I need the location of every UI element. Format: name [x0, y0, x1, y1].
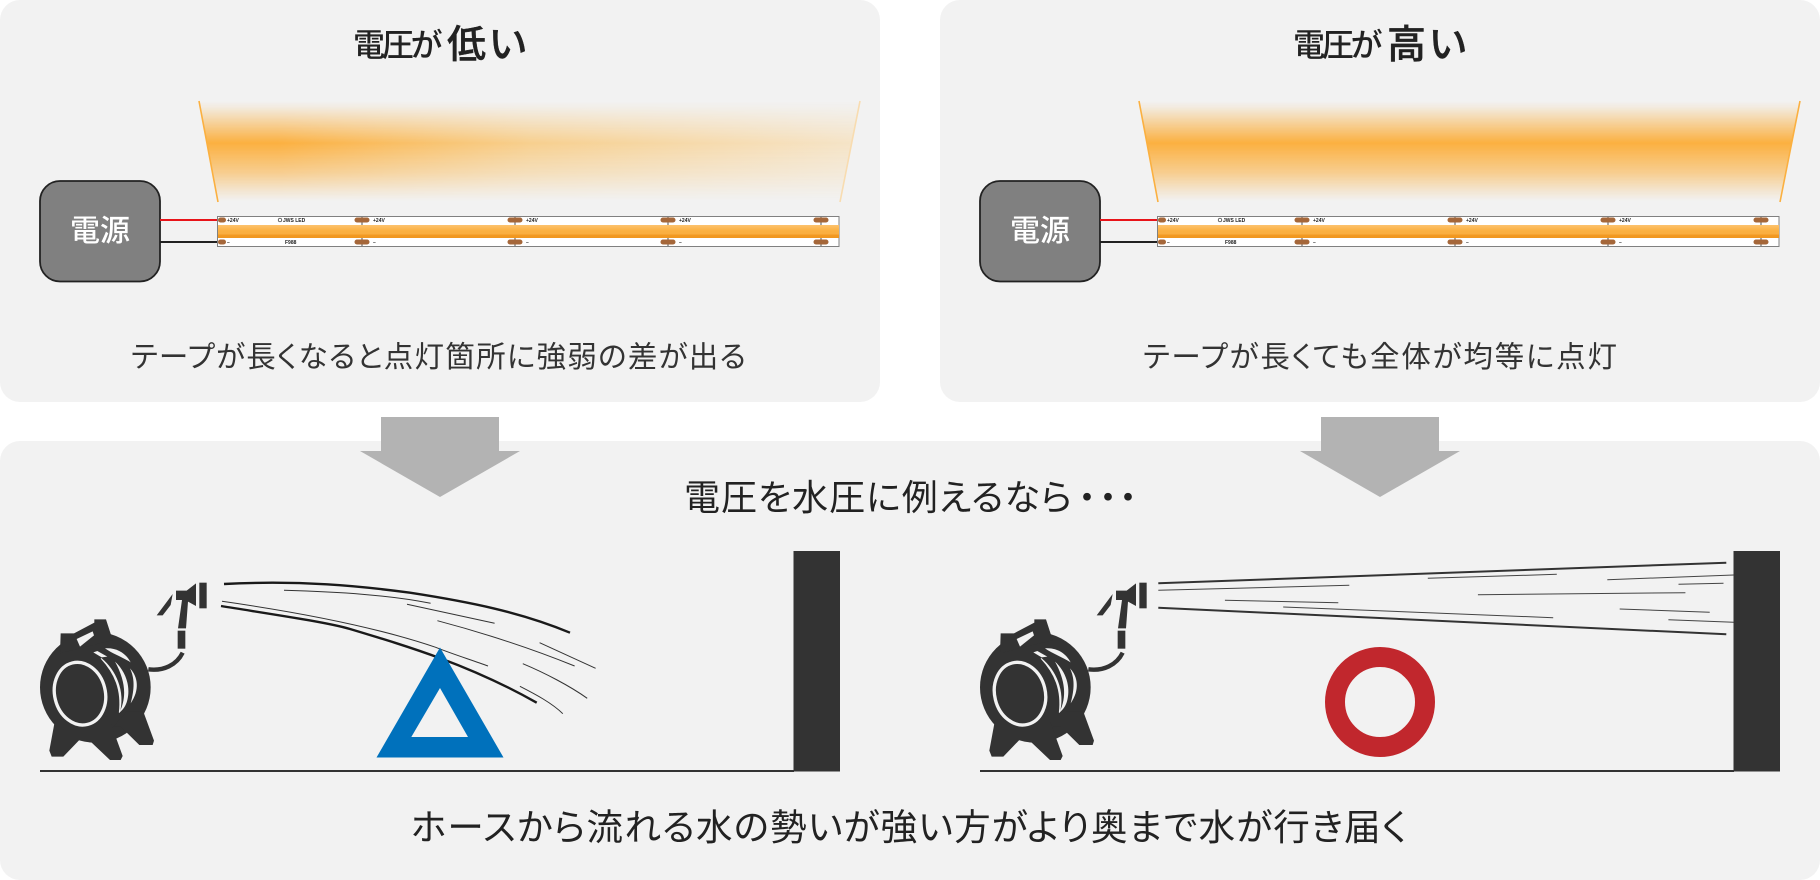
heading: low voltage: [353, 24, 526, 67]
LED tape: −: [679, 240, 682, 246]
LED tape: F988: [285, 240, 297, 246]
LED tape: +24V: [1167, 218, 1179, 224]
power supply: [40, 181, 160, 282]
heading: analogy: ・: [1110, 477, 1146, 518]
heading: high voltage: [1293, 24, 1466, 67]
LED tape: JWS LED: [1223, 218, 1246, 224]
LED tape: −: [1313, 240, 1316, 246]
LED tape: −: [526, 240, 529, 246]
water stream: reaching wall: [1158, 563, 1734, 634]
heading: low voltage: 電圧が: [353, 27, 443, 63]
icon: hose reel and nozzle, left: [40, 583, 207, 760]
LED tape: +24V: [227, 218, 239, 224]
water stream: falling short: [221, 583, 596, 714]
light glow: even: [1139, 101, 1800, 202]
LED tape: [218, 216, 839, 246]
LED tape: −: [373, 240, 376, 246]
panel: low voltage: [0, 0, 880, 402]
heading: analogy: 電圧を水圧に例えるなら: [684, 477, 1072, 518]
LED tape: +24V: [679, 218, 691, 224]
heading: analogy: ・: [1090, 477, 1126, 518]
heading: analogy: ・: [1069, 477, 1105, 518]
LED tape: +24V: [526, 218, 538, 224]
LED tape: JWS LED: [283, 218, 306, 224]
triangle mark: [376, 648, 504, 758]
ground line right: [980, 770, 1734, 772]
heading: high voltage: 高い: [1387, 24, 1466, 67]
LED tape: [1158, 216, 1779, 246]
icon: hose reel and nozzle, right: [980, 583, 1147, 760]
LED tape: +24V: [373, 218, 385, 224]
caption: analogy conclusion: ホースから流れる水の勢いが強い方がより奥まで水が行き届く: [411, 807, 1407, 848]
caption: low voltage: テープが長くなると点灯箇所に強弱の差が出る: [131, 341, 746, 374]
power supply: 電源: [70, 215, 130, 248]
heading: high voltage: 電圧が: [1293, 27, 1383, 63]
light glow: fading: [199, 101, 860, 202]
LED tape: −: [1466, 240, 1469, 246]
LED tape: F988: [1225, 240, 1237, 246]
arrow: right: [1300, 417, 1460, 497]
wall left: [794, 551, 840, 772]
LED tape: +24V: [1466, 218, 1478, 224]
LED tape: +24V: [1619, 218, 1631, 224]
wires: [160, 220, 219, 242]
caption: high voltage: テープが長くても全体が均等に点灯: [1143, 341, 1617, 374]
wall right: [1734, 551, 1780, 772]
circle mark: [1335, 657, 1425, 747]
wires: [1100, 220, 1159, 242]
LED tape: −: [1619, 240, 1622, 246]
power supply: [980, 181, 1100, 282]
panel: water pressure analogy: [0, 441, 1820, 880]
LED tape: +24V: [1313, 218, 1325, 224]
arrow: left: [360, 417, 520, 497]
power supply: 電源: [1010, 215, 1070, 248]
ground line left: [40, 770, 794, 772]
heading: low voltage: 低い: [447, 24, 526, 67]
LED tape: −: [1167, 240, 1170, 246]
LED tape: −: [227, 240, 230, 246]
panel: high voltage: [940, 0, 1820, 402]
